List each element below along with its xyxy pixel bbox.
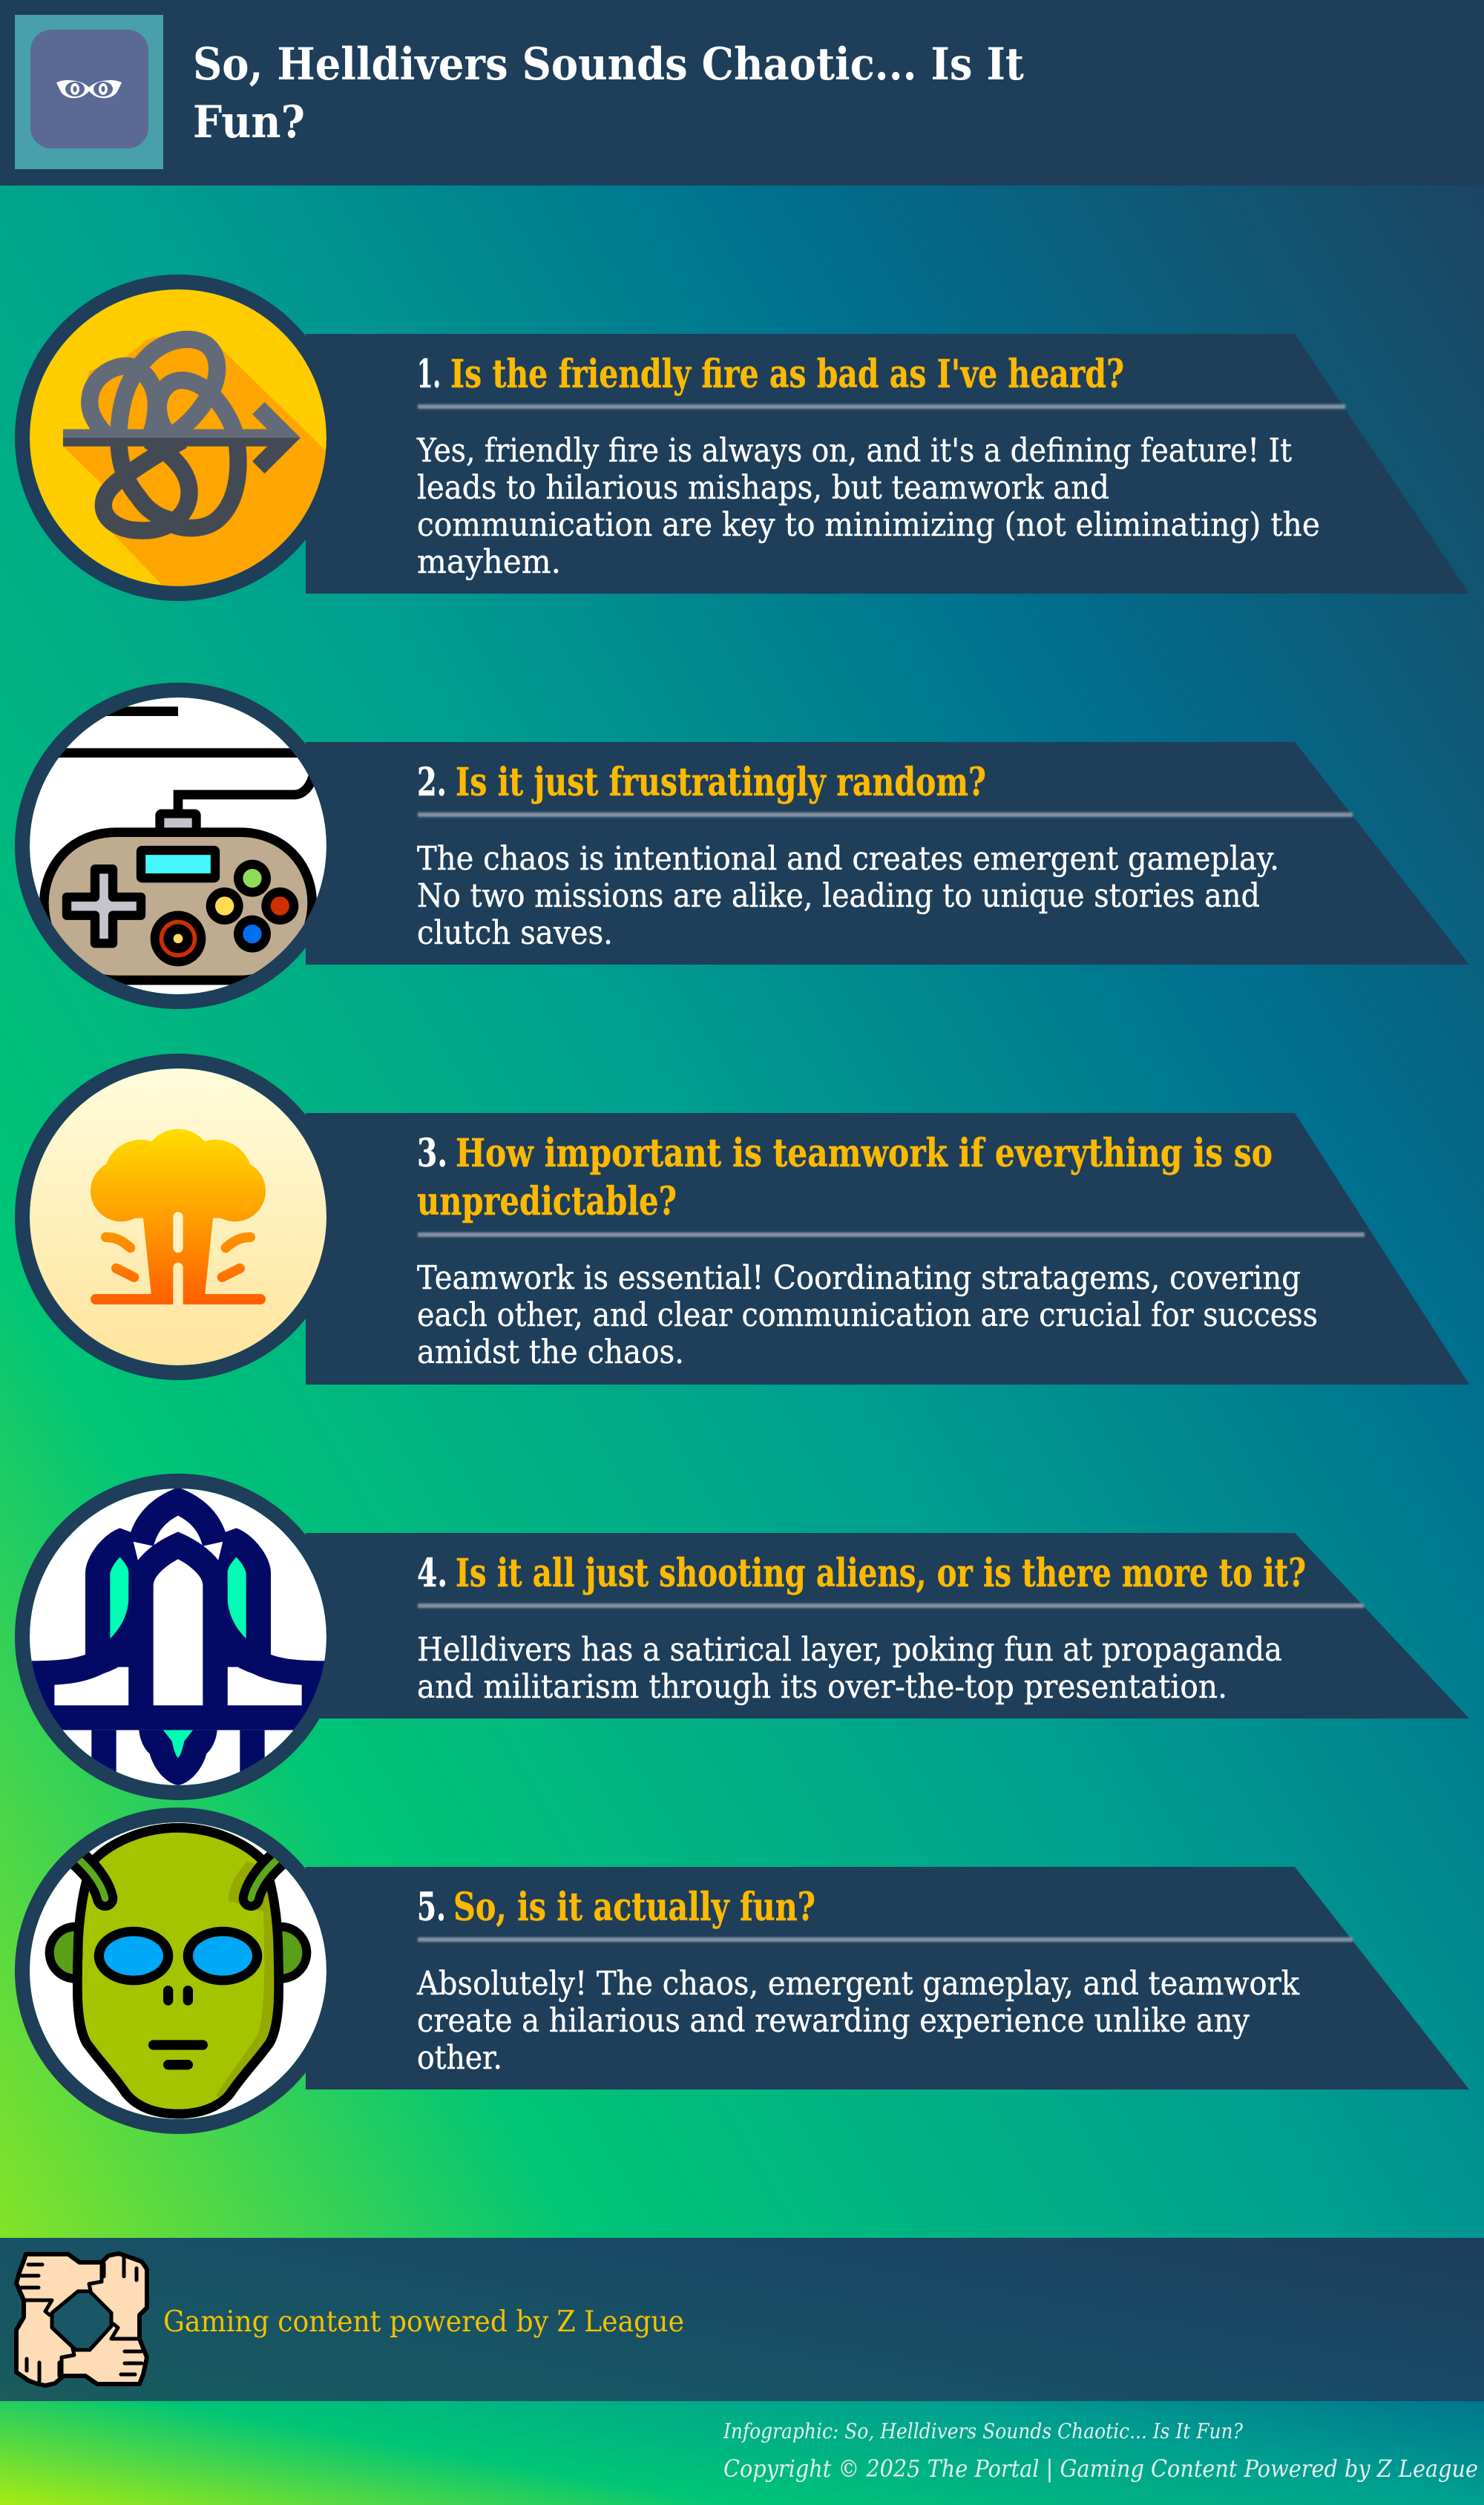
panel 2: randomness xyxy=(306,742,1469,965)
body 1: mayhem. xyxy=(417,543,561,581)
heading 2: Is it just frustratingly random? xyxy=(456,760,986,805)
body 1 xyxy=(416,432,1320,581)
heading 3: 3. xyxy=(417,1131,447,1176)
body 3: amidst the chaos. xyxy=(417,1333,684,1371)
icon: tangled arrow xyxy=(22,282,334,606)
heading 5: 5. xyxy=(417,1885,446,1930)
body 5 xyxy=(416,1965,1299,2077)
body 2: clutch saves. xyxy=(417,914,613,952)
heading 3: unpredictable? xyxy=(417,1179,677,1224)
panel 4: satire xyxy=(306,1533,1469,1718)
heading 1: Is the friendly fire as bad as I've heard? xyxy=(450,352,1124,397)
heading 3: How important is teamwork if everything is so xyxy=(456,1131,1273,1176)
body 3 xyxy=(417,1259,1318,1371)
body 1: Yes, friendly fire is always on, and it's a defining feature! It xyxy=(416,432,1292,470)
icon: game controller xyxy=(22,690,334,1002)
icon: mushroom cloud xyxy=(22,1061,334,1373)
title: So, Helldivers Sounds Chaotic... Is It xyxy=(193,39,1024,91)
heading 3 xyxy=(417,1131,1273,1224)
footer tagline: Gaming content powered by Z League xyxy=(163,2305,684,2339)
title xyxy=(193,39,1024,148)
heading 5: So, is it actually fun? xyxy=(453,1885,815,1930)
body 5: Absolutely! The chaos, emergent gameplay, and teamwork xyxy=(416,1965,1299,2003)
credits: Infographic: So, Helldivers Sounds Chaotic... Is It Fun? xyxy=(723,2419,1244,2443)
body 1: leads to hilarious mishaps, but teamwork and xyxy=(417,469,1109,507)
body 1: communication are key to minimizing (not eliminating) the xyxy=(417,506,1320,544)
icon: dropship xyxy=(22,1481,334,1793)
body 2: The chaos is intentional and creates emergent gameplay. xyxy=(417,840,1279,878)
body 2: No two missions are alike, leading to unique stories and xyxy=(417,877,1260,915)
heading 4: 4. xyxy=(417,1551,447,1596)
heading 2: 2. xyxy=(417,760,447,805)
body 5: other. xyxy=(417,2039,502,2077)
body 3: each other, and clear communication are crucial for success xyxy=(417,1296,1318,1334)
logo tile xyxy=(15,15,163,169)
panel 5: is it fun xyxy=(306,1867,1469,2089)
icon: alien face xyxy=(22,1815,334,2127)
heading 1: 1. xyxy=(417,352,441,397)
body 5: create a hilarious and rewarding experience unlike any xyxy=(417,2002,1250,2040)
body 4 xyxy=(417,1631,1282,1706)
panel 1: friendly fire xyxy=(306,334,1469,594)
icon: four linked hands xyxy=(16,2253,147,2386)
body 4: Helldivers has a satirical layer, poking fun at propaganda xyxy=(417,1631,1282,1669)
body 2 xyxy=(417,840,1279,952)
title: Fun? xyxy=(193,96,305,148)
credits xyxy=(723,2419,1478,2483)
header band xyxy=(0,0,1484,186)
body 3: Teamwork is essential! Coordinating stratagems, covering xyxy=(417,1259,1301,1297)
footer band xyxy=(0,2238,1484,2401)
body 4: and militarism through its over-the-top presentation. xyxy=(417,1668,1227,1706)
panel 3: teamwork xyxy=(306,1113,1469,1385)
